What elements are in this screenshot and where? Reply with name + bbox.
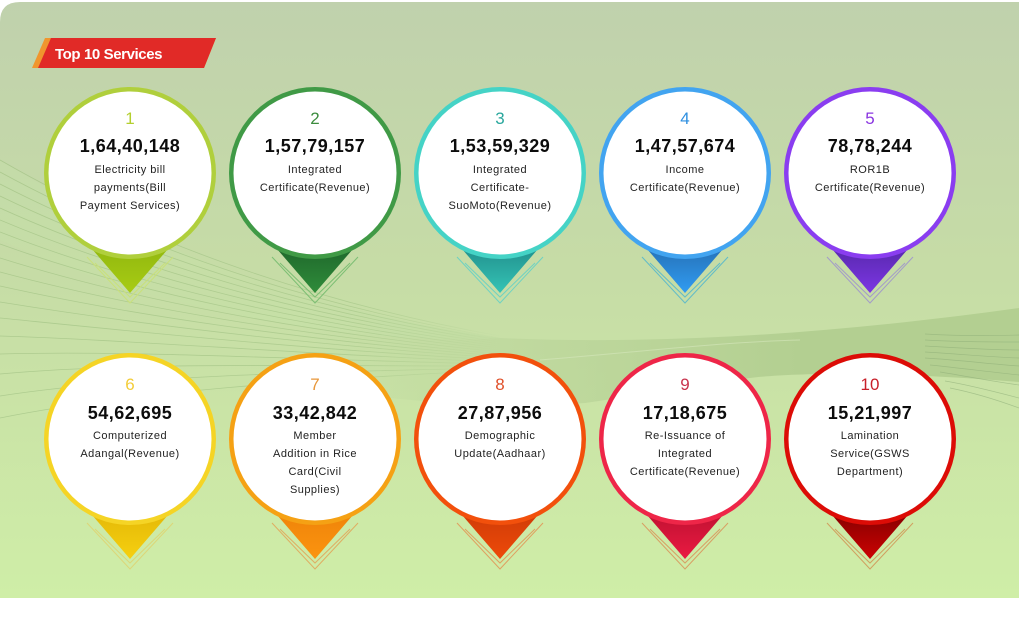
pin 1: [44, 87, 216, 304]
pin 9: Integrated: [658, 448, 712, 460]
pin 1: 1: [125, 109, 135, 128]
pin 4: 1,47,57,674: [635, 136, 735, 156]
pin 2: [229, 87, 401, 304]
pin 8: Demographic: [465, 430, 535, 442]
pin 7: Member: [293, 430, 337, 442]
pin 5: ROR1B: [850, 164, 890, 176]
pin 7: Supplies): [290, 484, 340, 496]
pin 3: Certificate-: [471, 182, 529, 194]
pin 7: 7: [310, 375, 320, 394]
pin 1: payments(Bill: [94, 182, 166, 194]
pin 9: [599, 353, 771, 570]
pin 4: Certificate(Revenue): [630, 182, 740, 194]
pin 5: 78,78,244: [828, 136, 912, 156]
title banner: [32, 38, 216, 68]
pin 1: 1,64,40,148: [80, 136, 180, 156]
pin 3: 3: [495, 109, 505, 128]
pin 9: 17,18,675: [643, 403, 727, 423]
pin 9: Certificate(Revenue): [630, 466, 740, 478]
pin 8: Update(Aadhaar): [454, 448, 546, 460]
pin 10: 15,21,997: [828, 403, 912, 423]
pin 10: Service(GSWS: [830, 448, 910, 460]
pin 2: Certificate(Revenue): [260, 182, 370, 194]
pin 8: 8: [495, 375, 505, 394]
pin 2: 2: [310, 109, 320, 128]
pin 4: 4: [680, 109, 690, 128]
pin 1: Payment Services): [80, 200, 180, 212]
pin 9: 9: [680, 375, 690, 394]
pin 4: Income: [666, 164, 704, 176]
pin 8: 27,87,956: [458, 403, 542, 423]
pin 6: 54,62,695: [88, 403, 172, 423]
pin 6: 6: [125, 375, 135, 394]
pin 4: [599, 87, 771, 304]
pin 8: [414, 353, 586, 570]
pin 7: 33,42,842: [273, 403, 357, 423]
pin 6: Computerized: [93, 430, 167, 442]
pin 2: Integrated: [288, 164, 342, 176]
pin 3: SuoMoto(Revenue): [449, 200, 551, 212]
pin 7: [229, 353, 401, 570]
pin 5: Certificate(Revenue): [815, 182, 925, 194]
pin 3: Integrated: [473, 164, 527, 176]
pin 3: 1,53,59,329: [450, 136, 550, 156]
pin 10: [784, 353, 956, 570]
pin 10: 10: [861, 375, 879, 394]
pin 2: 1,57,79,157: [265, 136, 365, 156]
pin 6: [44, 353, 216, 570]
pin 6: Adangal(Revenue): [80, 448, 180, 460]
pin 1: Electricity bill: [94, 164, 166, 176]
title text: Top 10 Services: [55, 46, 162, 63]
pin 3: [414, 87, 586, 304]
pin 7: Addition in Rice: [273, 448, 357, 460]
pin 10: Lamination: [841, 430, 899, 442]
pin 10: Department): [837, 466, 903, 478]
pin 9: Re-Issuance of: [645, 430, 725, 442]
pin 5: [784, 87, 956, 304]
pin 7: Card(Civil: [288, 466, 341, 478]
pin 5: 5: [865, 109, 875, 128]
